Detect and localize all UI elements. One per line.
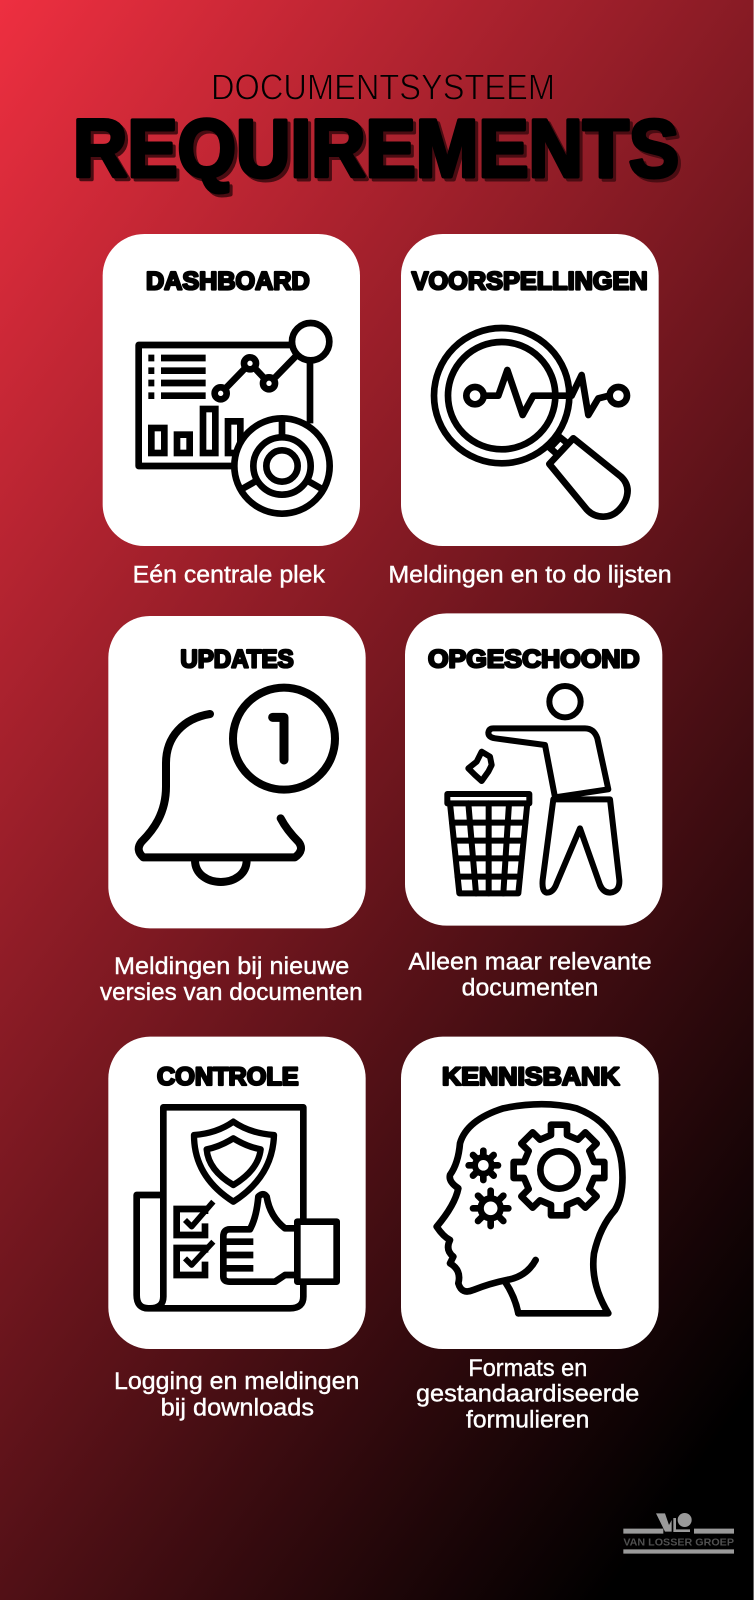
caption: controle: Logging en meldingen: [114, 1368, 359, 1395]
logo: van losser groep: [623, 1513, 734, 1554]
logo: van losser groep: VAN LOSSER GROEP: [623, 1537, 734, 1548]
icon: dashboard screen with charts: [139, 323, 330, 514]
panel: updates: [100, 616, 366, 1006]
heading: requirements: REQUIREMENTS: [73, 104, 679, 194]
icon: bell with badge: [139, 688, 335, 882]
caption: kennisbank: gestandaardiseerde: [416, 1381, 639, 1408]
caption: controle: bij downloads: [161, 1395, 314, 1422]
caption: updates: Meldingen bij nieuwe: [114, 953, 349, 980]
panel: voorspellingen: [388, 234, 672, 589]
heading: dashboard: DASHBOARD: [146, 268, 310, 296]
caption: controle: [114, 1368, 359, 1422]
caption: opgeschoond: documenten: [462, 975, 598, 1002]
caption: voorspellingen: Meldingen en to do lijsten: [388, 562, 672, 589]
caption: kennisbank: [416, 1355, 639, 1433]
caption: opgeschoond: [408, 948, 652, 1002]
icon: magnifier with pulse: [434, 328, 628, 517]
caption: dashboard: Eén centrale plek: [133, 562, 326, 589]
heading: requirements: REQUIREMENTS: [76, 106, 682, 198]
caption: opgeschoond: Alleen maar relevante: [408, 948, 652, 975]
icon: person throwing paper in basket: [447, 686, 619, 893]
title: documentsysteem: DOCUMENTSYSTEEM: [211, 66, 555, 108]
panel: kennisbank: [401, 1037, 659, 1433]
caption: kennisbank: Formats en: [468, 1355, 587, 1382]
icon: head with gears: [437, 1104, 622, 1313]
heading: controle: CONTROLE: [157, 1063, 299, 1091]
panel: controle: [108, 1037, 366, 1422]
icon: document with shield and thumbs up: [137, 1107, 337, 1308]
caption: kennisbank: formulieren: [466, 1406, 589, 1433]
panel: opgeschoond: [405, 613, 662, 1002]
heading: voorspellingen: VOORSPELLINGEN: [412, 268, 648, 296]
heading: kennisbank: KENNISBANK: [442, 1063, 620, 1091]
heading: opgeschoond: OPGESCHOOND: [428, 646, 640, 674]
heading: updates: UPDATES: [180, 646, 294, 674]
panel: dashboard: [103, 234, 360, 589]
caption: updates: [100, 953, 363, 1006]
caption: updates: versies van documenten: [100, 979, 363, 1006]
